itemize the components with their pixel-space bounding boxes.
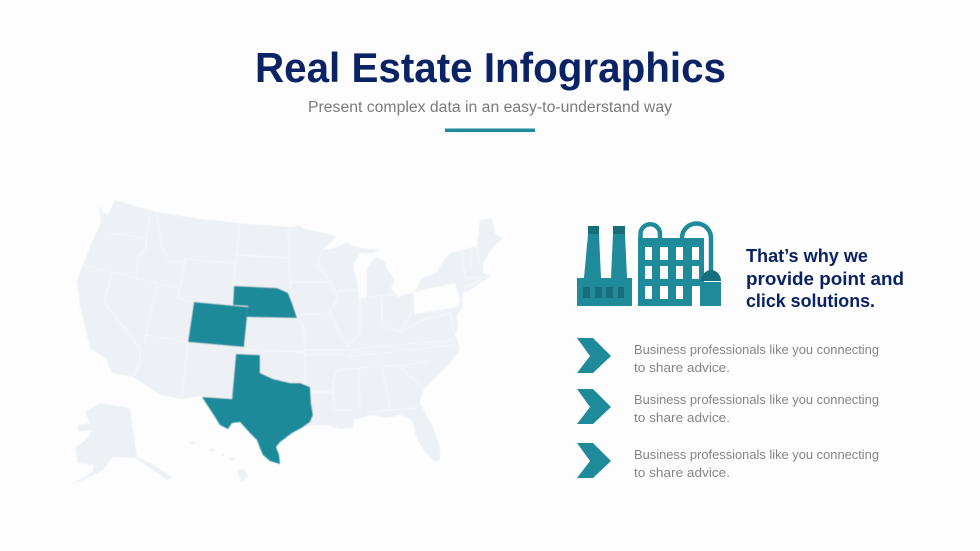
map: state borders [82,210,487,412]
icon: chevron 3 [577,443,611,478]
map: Wyoming [188,302,248,347]
text: bullet 1 [634,342,879,375]
bullet row 2 [577,389,879,425]
title: Real Estate Infographics [255,44,726,91]
map: Pennsylvania cutout [413,283,460,314]
US map [70,200,503,485]
map: Hawaii [190,442,249,482]
heading: solutions: That’s why we [746,246,868,266]
map: Nebraska [233,286,297,318]
text: bullet 2: to share advice. [634,410,730,425]
icon: chevron 1 [577,338,611,373]
text: bullet 2 [634,392,879,425]
text: bullet 3: Business professionals like you connecting [634,447,879,462]
text: bullet 2: Business professionals like you connecting [634,392,879,407]
icon: chevron 2 [577,389,611,424]
text: bullet 1: Business professionals like you connecting [634,342,879,357]
text: bullet 3: to share advice. [634,465,730,480]
bullet row 3 [577,443,879,480]
title underline [445,128,535,132]
heading: solutions: provide point and [746,269,904,289]
icon: factory with chimneys [577,226,632,306]
map: Texas [202,354,313,464]
map: Alaska [70,403,173,485]
bullet row 1 [577,338,879,375]
icon: plant building [638,224,721,306]
heading: solutions: click solutions. [746,291,875,311]
icon: factory and plant [577,224,721,306]
subtitle: Present complex data in an easy-to-understand way [308,99,672,116]
map: contiguous states [77,200,503,462]
heading: solutions [746,246,904,311]
text: bullet 1: to share advice. [634,360,730,375]
text: bullet 3 [634,447,879,480]
